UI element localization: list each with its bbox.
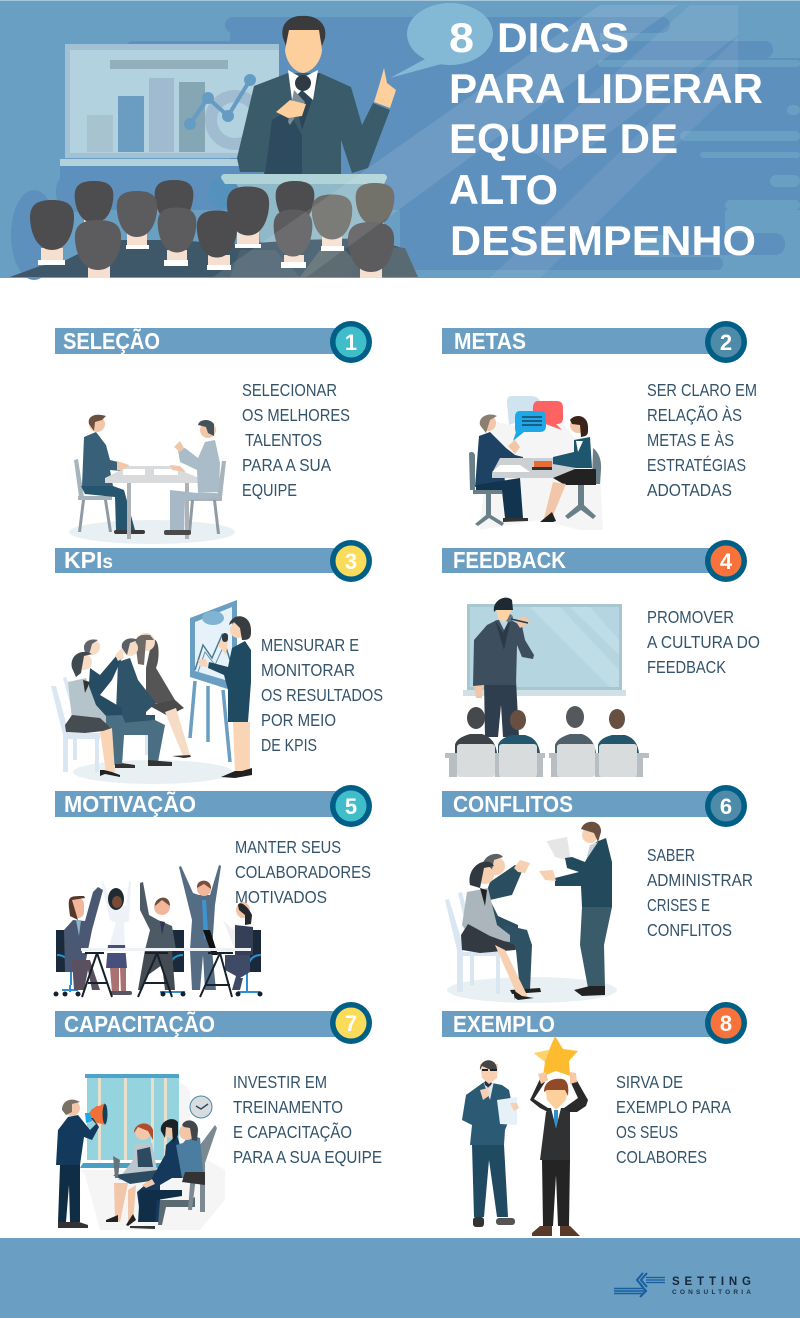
- panel: 4 feedback: [442, 540, 760, 777]
- speech bubble: [390, 3, 493, 78]
- text: selecionar: EQUIPE: [242, 480, 297, 500]
- illustration: celebrating team at desks: [54, 865, 262, 997]
- heading bar: conflitos: 6: [720, 794, 732, 819]
- panel: 7 capacitação: [55, 1002, 382, 1230]
- text: saber: [647, 845, 753, 940]
- text: saber: CRISES E: [647, 895, 710, 915]
- main title: [449, 14, 763, 264]
- heading bar: capacitação: 7: [345, 1011, 357, 1036]
- audience heads: [10, 180, 418, 278]
- text: ser claro: [647, 380, 757, 500]
- heading bar: kpis: 3: [345, 549, 357, 574]
- text: sirva de exemplo: [616, 1072, 731, 1167]
- text: manter: [235, 837, 371, 907]
- text: investir: PARA A SUA EQUIPE: [233, 1147, 382, 1167]
- text: selecionar: [242, 380, 350, 500]
- panel: 1 seleção: [55, 321, 372, 544]
- text: mensurar: POR MEIO: [261, 710, 336, 730]
- main title: DESEMPENHO: [450, 217, 756, 264]
- text: manter: MANTER SEUS: [235, 837, 341, 857]
- text: ser claro: ADOTADAS: [647, 480, 732, 500]
- heading bar: metas: METAS: [454, 328, 526, 354]
- logo: setting consultoria: CONSULTORIA: [672, 1289, 751, 1296]
- text: selecionar: SELECIONAR: [242, 380, 337, 400]
- panel: 6 conflitos: [442, 785, 753, 1003]
- text: mensurar: OS RESULTADOS: [261, 685, 383, 705]
- text: promover: PROMOVER: [647, 607, 734, 627]
- main title: PARA LIDERAR: [449, 65, 763, 112]
- text: manter: MOTIVADOS: [235, 887, 327, 907]
- logo: setting consultoria: [614, 1273, 751, 1297]
- text: mensurar: MENSURAR E: [261, 635, 359, 655]
- text: ser claro: SER CLARO EM: [647, 380, 757, 400]
- text: promover: [647, 607, 760, 677]
- heading bar: conflitos: CONFLITOS: [453, 791, 573, 817]
- text: ser claro: RELAÇÃO ÀS: [647, 404, 742, 425]
- text: sirva de exemplo: OS SEUS: [616, 1122, 678, 1142]
- logo: setting consultoria: SETTING: [672, 1276, 751, 1288]
- heading bar: exemplo: EXEMPLO: [453, 1011, 555, 1037]
- illustration: meeting with speech bubbles: [469, 396, 603, 530]
- text: promover: FEEDBACK: [647, 657, 726, 677]
- heading bar: seleção: [55, 321, 372, 363]
- heading bar: metas: [442, 321, 747, 363]
- main title: ALTO: [449, 166, 558, 213]
- icon: wall clock: [190, 1096, 212, 1118]
- heading bar: conflitos: [442, 785, 747, 827]
- presentation screen with bar chart: [60, 44, 279, 166]
- heading bar: metas: 2: [720, 330, 732, 355]
- heading bar: seleção: SELEÇÃO: [63, 327, 160, 354]
- text: saber: SABER: [647, 845, 695, 865]
- speaker at podium: [221, 16, 396, 250]
- text: sirva de exemplo: EXEMPLO PARA: [616, 1097, 731, 1117]
- text: selecionar: PARA A SUA: [242, 455, 331, 475]
- text: sirva de exemplo: SIRVA DE: [616, 1072, 683, 1092]
- heading bar: motivação: 5: [345, 794, 357, 819]
- text: selecionar: TALENTOS: [245, 430, 322, 450]
- illustration: discussion between seated and standing people: [445, 822, 617, 1003]
- heading bar: feedback: 4: [720, 549, 733, 574]
- heading bar: capacitação: CAPACITAÇÃO: [64, 1010, 215, 1037]
- text: mensurar: MONITORAR: [261, 660, 355, 680]
- heading bar: motivação: [55, 785, 372, 827]
- text: ser claro: METAS E ÀS: [647, 430, 734, 450]
- heading bar: seleção: 1: [345, 330, 357, 355]
- illustration: presenter at flip chart: [51, 600, 252, 784]
- panel: 3 kpis: [51, 540, 383, 784]
- text: investir: INVESTIR EM: [233, 1072, 327, 1092]
- illustration: interview at table: [69, 415, 235, 544]
- footer band: [0, 1238, 800, 1318]
- text: mensurar: DE KPIS: [261, 735, 317, 755]
- heading bar: exemplo: [442, 1002, 747, 1044]
- text: mensurar: [261, 635, 383, 755]
- illustration: leader and person holding star: [462, 1036, 588, 1236]
- text: selecionar: OS MELHORES: [242, 405, 350, 425]
- text: sirva de exemplo: COLABORES: [616, 1147, 707, 1167]
- heading bar: feedback: [442, 540, 747, 582]
- header banner: [0, 0, 800, 280]
- heading bar: feedback: FEEDBACK: [453, 547, 566, 573]
- illustration: training with megaphone: [56, 1074, 225, 1230]
- illustration: speaker and seated audience: [445, 598, 649, 777]
- text: saber: ADMINISTRAR: [647, 870, 753, 890]
- main title: EQUIPE DE: [449, 115, 678, 162]
- heading bar: kpis: [55, 540, 372, 582]
- heading bar: exemplo: 8: [720, 1011, 732, 1036]
- heading bar: kpis: KPIs: [64, 547, 113, 573]
- text: manter: COLABORADORES: [235, 862, 371, 882]
- text: saber: CONFLITOS: [647, 920, 732, 940]
- main title: DICAS: [497, 14, 629, 61]
- text: investir: TREINAMENTO: [233, 1097, 343, 1117]
- panel: 5 motivação: [54, 785, 372, 997]
- panel: 8 exemplo: [442, 1002, 747, 1236]
- main title: 8: [449, 14, 474, 61]
- heading bar: capacitação: [55, 1002, 372, 1044]
- text: investir: [233, 1072, 382, 1167]
- panel: 2 metas: [442, 321, 757, 530]
- text: investir: E CAPACITAÇÃO: [233, 1121, 352, 1142]
- text: promover: A CULTURA DO: [647, 632, 760, 652]
- text: ser claro: ESTRATÉGIAS: [647, 455, 746, 475]
- heading bar: motivação: MOTIVAÇÃO: [64, 790, 196, 817]
